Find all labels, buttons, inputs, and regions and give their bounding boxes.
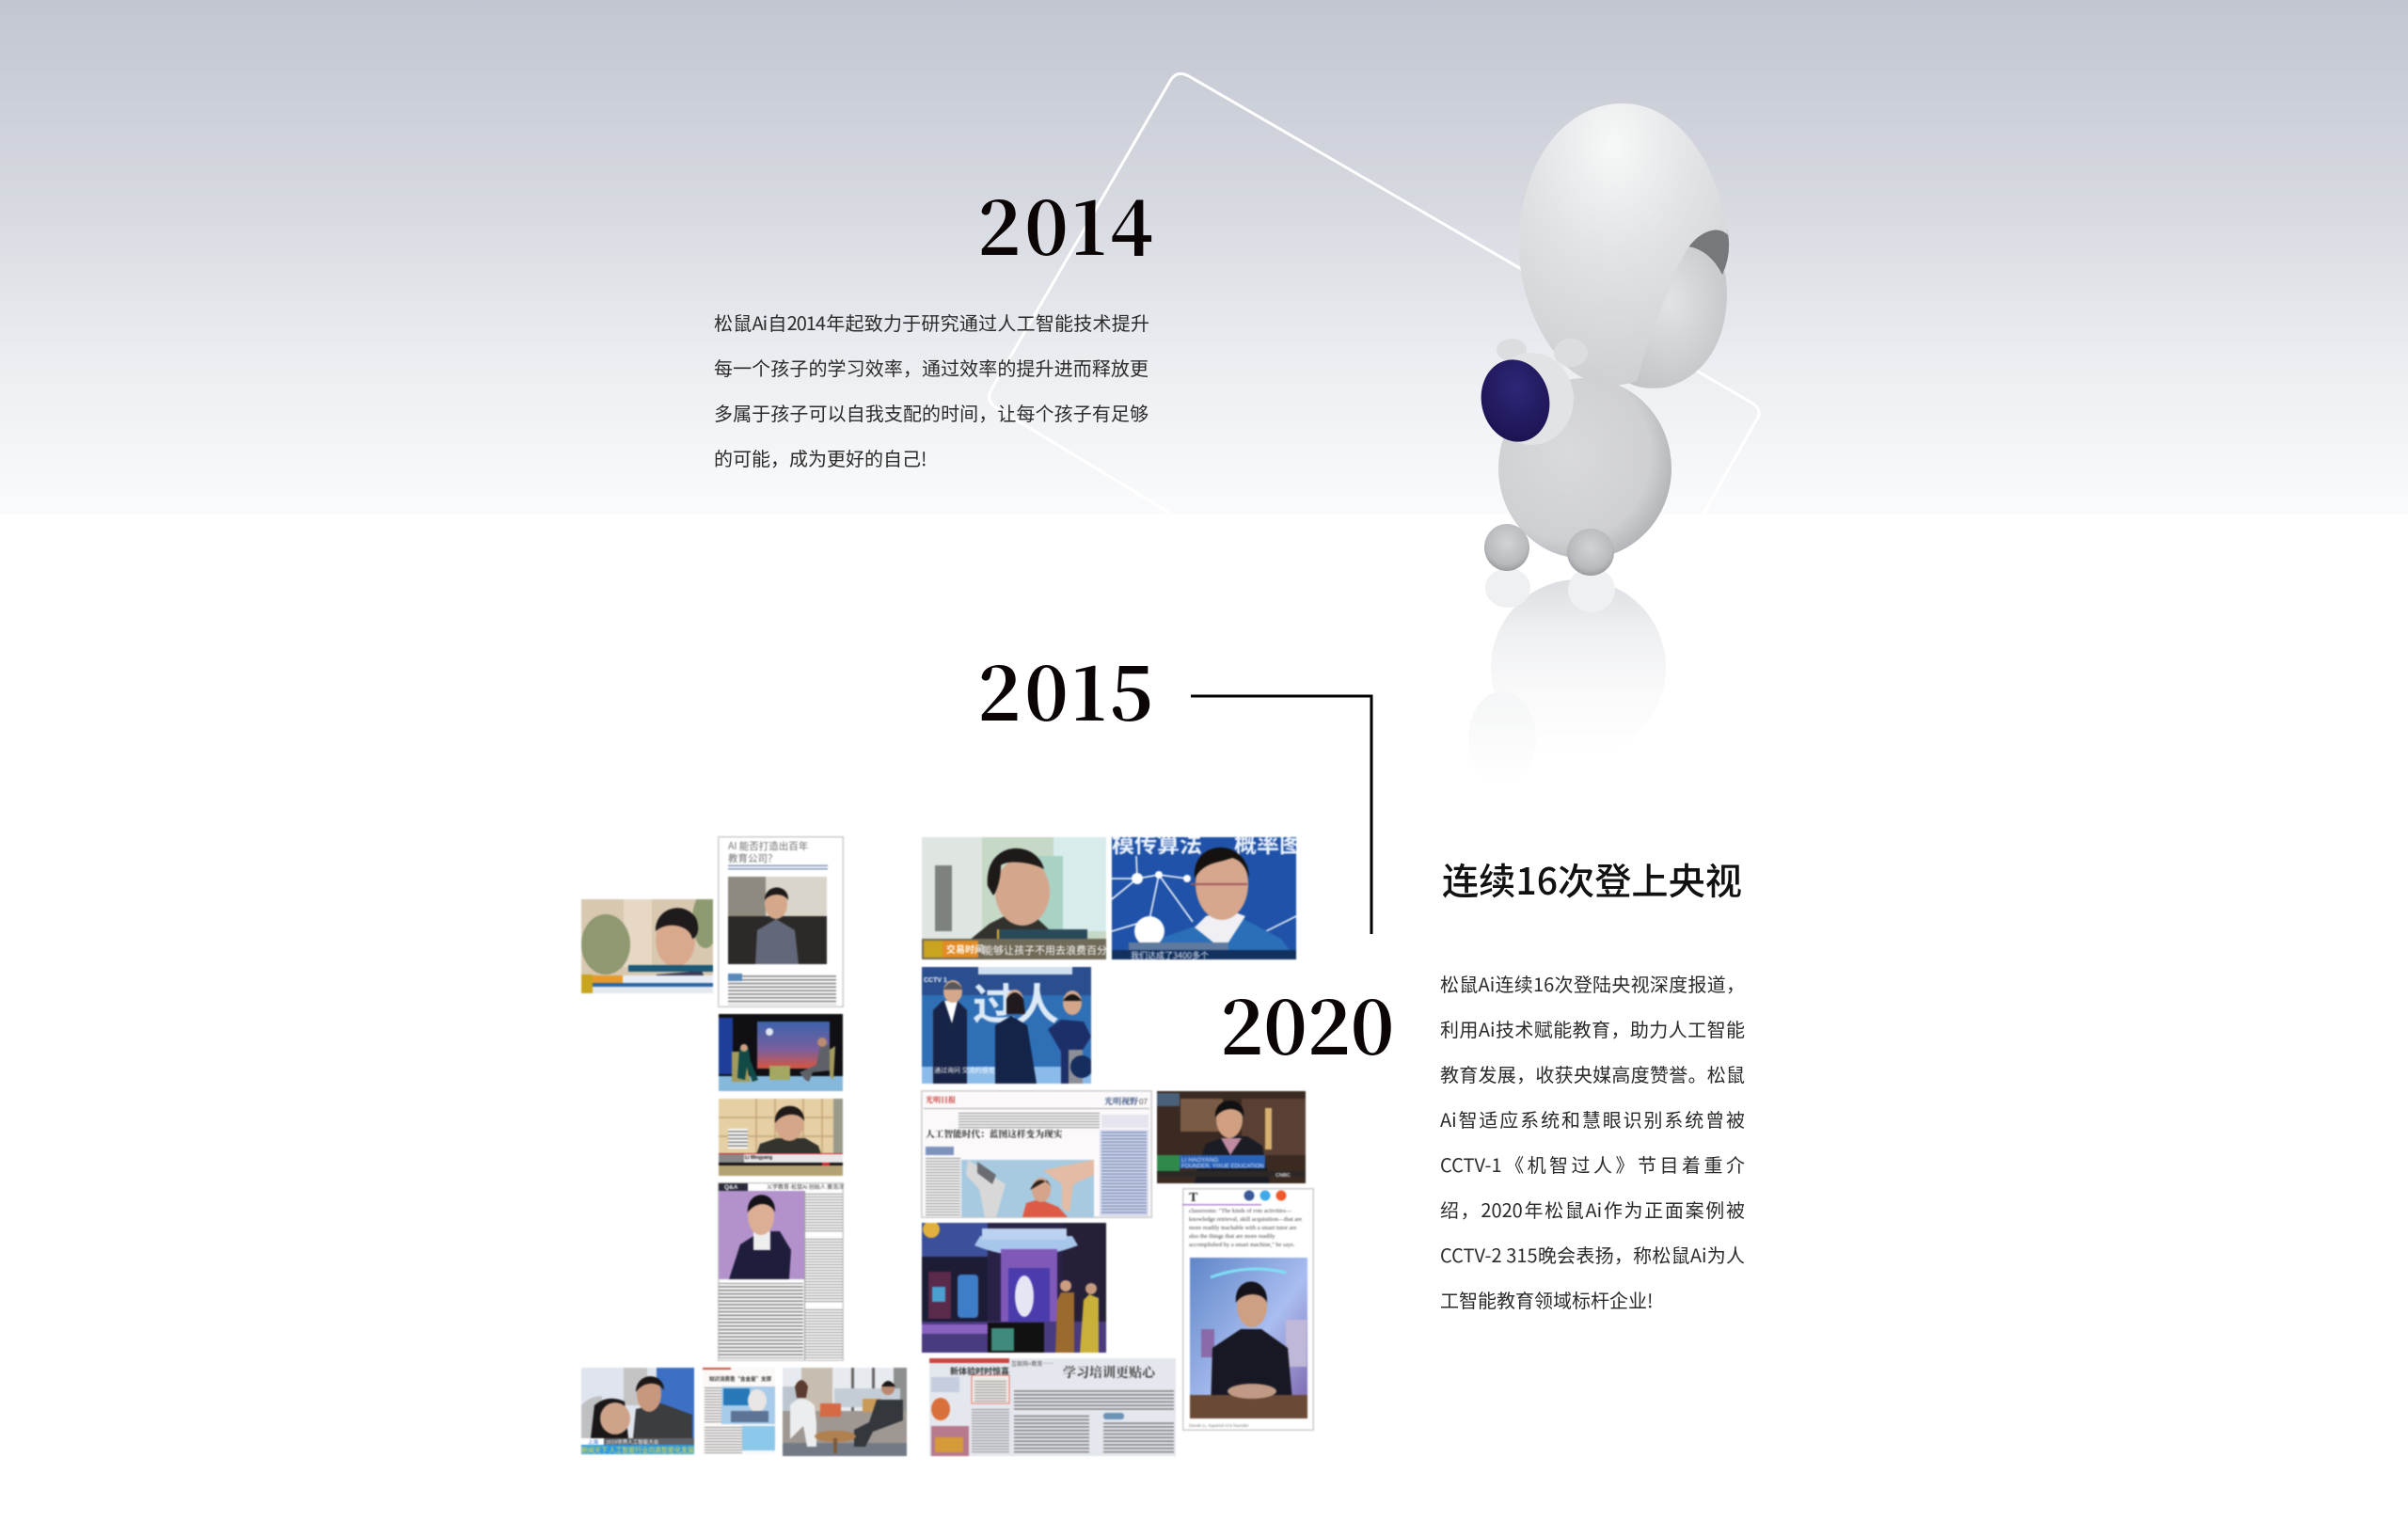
photo: Hunan TV stage show [921, 1222, 1107, 1354]
reflection of feet [1485, 567, 1615, 612]
photo: CCTV-1 three presenters on stage: 通过询问 交流的感觉 [934, 1066, 995, 1075]
snout [1489, 353, 1574, 445]
reflection of snout [1468, 691, 1536, 785]
newspaper: Guangming Daily AI article: 光明视野 [1104, 1095, 1138, 1107]
nose [1474, 353, 1557, 449]
newspaper: 学习培训更贴心 [928, 1357, 1176, 1457]
magazine page: TIME founder portrait: T [1189, 1191, 1198, 1205]
magazine page: AI百年教育公司: AI 能否打造出百年 [728, 839, 808, 853]
2014 description text [714, 309, 1149, 471]
magazine page: AI百年教育公司 [717, 835, 845, 1008]
photo: interview with QR code: Li Mingyang [745, 1155, 772, 1161]
2014 description text: 每一个孩子的学习效率，通过效率的提升进而释放更 [714, 354, 1149, 381]
photo: CCTV-2 interview [921, 836, 1107, 960]
newspaper: 知识消费 [702, 1367, 776, 1454]
magazine page: TIME founder portrait: more readily teachable with a smart tutor are [1189, 1225, 1297, 1231]
photo: CCTV-1 three presenters on stage: 过人 [973, 971, 1059, 1033]
robot squirrel mascot with reflection [1477, 103, 1729, 709]
year 2015: 2015 [977, 637, 1157, 742]
photo: TV interview with plants [580, 898, 714, 994]
2020 description text: CCTV-2 315晚会表扬，称松鼠Ai为人 [1440, 1241, 1745, 1268]
photo: blue network backdrop speaker [1111, 836, 1297, 960]
newspaper: 知识消费: 知识消费靠“含金量”支撑 [709, 1375, 772, 1383]
newspaper: Guangming Daily AI article [920, 1089, 1153, 1219]
body [1498, 378, 1671, 559]
2014 description text: 多属于孩子可以自我支配的时间，让每个孩子有足够 [714, 399, 1149, 426]
photo: TV studio talk show [718, 1013, 844, 1092]
newspaper: Guangming Daily AI article: 光明日报 [926, 1095, 956, 1105]
connector line from 2015 [1191, 694, 1373, 934]
inner head ball [1623, 244, 1727, 388]
year 2020: 2020 [1220, 971, 1394, 1076]
2014 description text: 松鼠Ai自2014年起致力于研究通过人工智能技术提升 [714, 309, 1149, 336]
newspaper: 学习培训更贴心: 新体验时时惊喜 [950, 1365, 1009, 1377]
photo: CNBC interview [1156, 1090, 1307, 1184]
2020 description text: CCTV-1《机智过人》节目着重介 [1440, 1150, 1745, 1178]
2020 description text [1440, 970, 1745, 1313]
top gradient background band [0, 0, 2408, 515]
2020 description text: 教育发展，收获央媒高度赞誉。松鼠 [1440, 1060, 1745, 1087]
photo: CCTV-1 three presenters on stage: CCTV 1 [924, 977, 947, 984]
feet [1484, 524, 1529, 571]
magazine page: Q&A portrait [717, 1181, 845, 1362]
newspaper: 学习培训更贴心: 互联网+教育—— [1011, 1359, 1054, 1368]
photo: sofa interview by the window [782, 1367, 908, 1457]
photo: CCTV World AI conference: 2019世界人工智能大会 [606, 1438, 659, 1446]
front foot [1567, 529, 1614, 576]
magazine page: TIME founder portrait: Derek Li, Squirrel AI's founder [1189, 1423, 1249, 1429]
2020 description text: 松鼠Ai连续16次登陆央视深度报道， [1440, 970, 1745, 997]
reflection of body [1491, 579, 1666, 756]
2014 description text: 的可能，成为更好的自己! [714, 444, 927, 471]
2020 description text: 绍，2020年松鼠Ai作为正面案例被 [1440, 1196, 1745, 1223]
ears [1497, 339, 1588, 367]
magazine page: TIME founder portrait: knowledge retrieval, skill acquisition—that are [1189, 1216, 1302, 1223]
heading: 16 CCTV appearances: 连续16次登上央视 [1442, 853, 1742, 906]
photo: CNBC interview: CNBC [1275, 1173, 1291, 1179]
photo: CNBC interview: FOUNDER, YIXUE EDUCATION [1181, 1165, 1263, 1170]
2020 description text: 利用Ai技术赋能教育，助力人工智能 [1440, 1015, 1745, 1042]
photo: interview with QR code [718, 1098, 844, 1177]
photo: CCTV World AI conference [580, 1367, 695, 1455]
2020 description text: 工智能教育领域标杆企业! [1440, 1286, 1653, 1313]
photo: CCTV-1 three presenters on stage [921, 966, 1092, 1085]
photo: CCTV World AI conference: 上海 [588, 1438, 599, 1446]
photo: CCTV-2 interview: 交易时间 [946, 942, 984, 956]
head cavity [1688, 228, 1729, 275]
magazine page: TIME founder portrait: classrooms: "The kinds of rote activities— [1189, 1208, 1292, 1214]
magazine page: Q&A portrait: 乂学教育-松鼠Ai 创始人 栗浩洋 [767, 1182, 844, 1191]
newspaper: 学习培训更贴心: 学习培训更贴心 [1063, 1363, 1157, 1382]
photo: CNBC interview: LI HAOYANG [1181, 1157, 1218, 1164]
magazine page: TIME founder portrait: accomplished by a smart machine," he says. [1189, 1242, 1295, 1248]
newspaper: Guangming Daily AI article: 人工智能时代：蓝图这样变为现实 [926, 1127, 1063, 1140]
magazine page: TIME founder portrait: also the things that are more readily [1189, 1233, 1275, 1240]
decorative rounded white rhombus outline [988, 71, 1761, 483]
newspaper: Guangming Daily AI article: 07 [1139, 1098, 1148, 1106]
magazine page: TIME founder portrait [1181, 1187, 1315, 1432]
year 2014: 2014 [977, 171, 1157, 277]
magazine page: Q&A portrait: Q&A [724, 1184, 738, 1191]
2020 description text: Ai智适应系统和慧眼识别系统曾被 [1440, 1105, 1745, 1133]
head shell [1519, 103, 1728, 386]
magazine page: AI百年教育公司: 教育公司？ [728, 851, 777, 865]
